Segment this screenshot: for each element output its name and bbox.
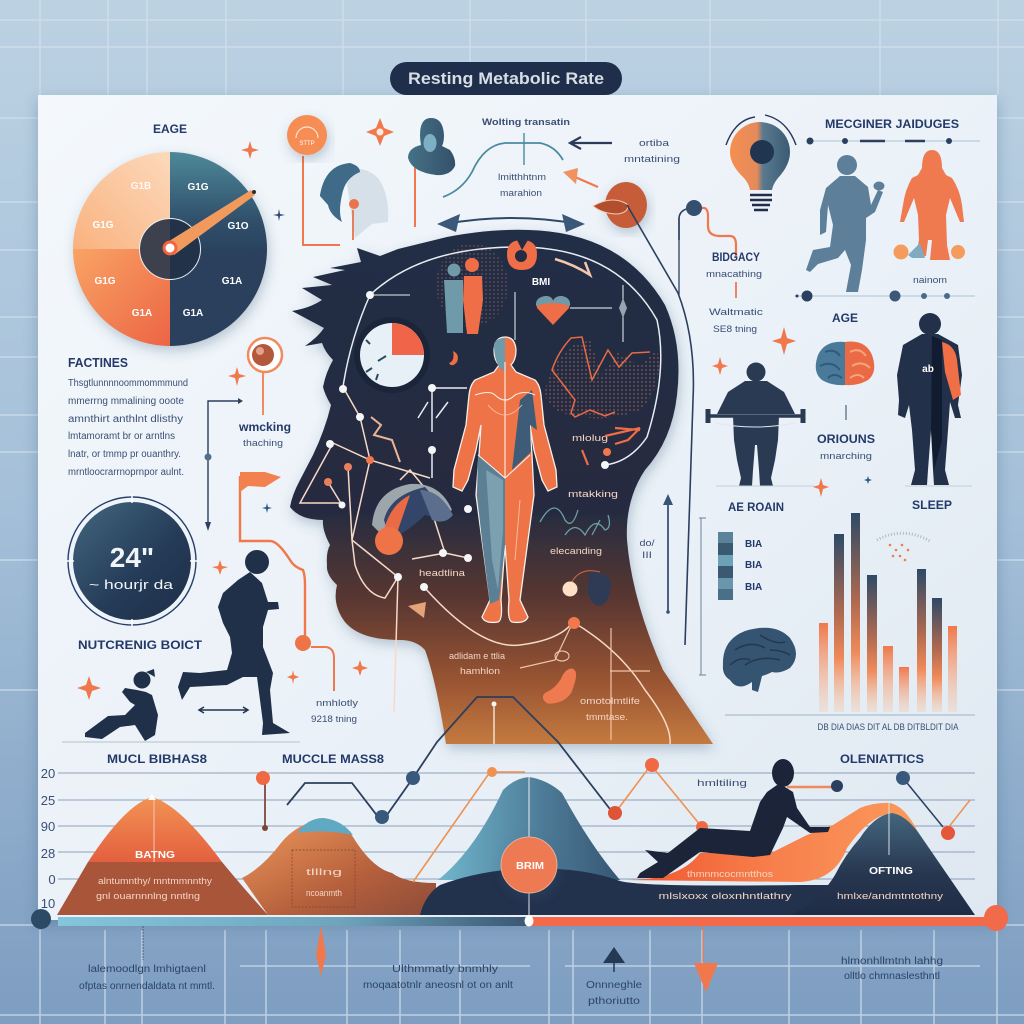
text: origins: ORIOUNS [817, 432, 875, 446]
head labels: hamhlon [460, 666, 500, 676]
text: origins [817, 405, 875, 461]
icon: clock [354, 317, 430, 393]
text: activity label [311, 698, 359, 724]
text: biology labels: SE8 tning [713, 324, 757, 334]
bottom annotations [79, 926, 943, 1007]
timeline bar [31, 905, 1008, 931]
mountain 4 navy peak: mlslxoxx oloxnhntlathry [658, 891, 792, 901]
axis labels: 25 [41, 793, 55, 808]
top flow diagram: lmitthhtnm [498, 172, 546, 182]
pie labels: G1A [132, 308, 152, 319]
navy man silhouette: ab [922, 364, 934, 375]
mountain 4 navy peak: hmlxe/andmtntothny [837, 891, 944, 901]
node dots [324, 291, 611, 706]
mountain 2 hill [242, 818, 436, 915]
axis labels [41, 766, 56, 911]
blue runner figure [806, 155, 884, 292]
mountain 4 navy peak: OFTING [869, 866, 913, 877]
pie labels: G1A [183, 308, 203, 319]
legend stripes [718, 532, 762, 600]
head labels: omotolmtlife [580, 696, 640, 706]
icon: 24 hour clock: 24" [110, 542, 154, 573]
connector: orange circuit left [240, 472, 334, 691]
icon: bust [408, 118, 455, 227]
pie labels: G1G [94, 276, 116, 287]
connected polylines [256, 697, 970, 882]
orange hump [627, 803, 918, 882]
text block: factors: amnthirt anthlnt dlisthy [68, 414, 183, 425]
icon: navy brain [723, 628, 796, 692]
pie labels: G1B [131, 181, 151, 192]
reclining person silhouette [637, 759, 830, 878]
head labels: elecanding [550, 546, 602, 556]
icon: orange dial badge with connector [287, 115, 340, 245]
pie labels: G1A [222, 276, 242, 287]
icon: check swoosh [555, 259, 590, 275]
top flow diagram [437, 117, 736, 258]
curve [443, 143, 563, 197]
dark wave base [420, 868, 975, 915]
double arrow [445, 218, 578, 224]
icon: female head profile [320, 163, 388, 240]
human anatomy body [453, 337, 557, 622]
bottom annotations: ofptas onrnendaldata nt mmtl. [79, 981, 215, 992]
orange centre circle: BRIM [516, 861, 544, 872]
orange kneeling figure [894, 150, 965, 285]
heading: nutrition: NUTCRENIG BOICT [78, 638, 203, 652]
mountain 4 navy peak [658, 803, 975, 915]
axis labels: 90 [41, 819, 55, 834]
head labels: mtakking [568, 489, 618, 499]
text block: factors: mrntloocrarrnoprnpor aulnt. [68, 467, 184, 478]
bottom line chart: hmltiling [697, 778, 747, 788]
bars [819, 513, 957, 712]
ground line [716, 485, 815, 487]
axis labels: 0 [48, 872, 56, 887]
text: biology labels: BIDGACY [712, 250, 760, 264]
icon: ring bead with stem [248, 338, 282, 415]
connector beads [694, 208, 736, 258]
bottom annotations: moqaatotnlr aneosnl ot on anlt [363, 980, 513, 991]
icon: sparkle [619, 298, 627, 318]
orange centre circle [501, 777, 557, 920]
mountain 2 hill: tlllng [306, 867, 342, 877]
bottom annotations: lalemoodlgn lmhigtaenl [88, 964, 206, 975]
icon: lightning [371, 417, 400, 462]
head labels: adlidam e ttlia [449, 651, 505, 661]
bottom annotations: olltlo chmnaslesthntl [844, 971, 940, 982]
text block: factors: mmerrng mmalining ooote [68, 396, 184, 407]
head labels [419, 433, 640, 722]
orange small arrow [582, 428, 640, 465]
navy man silhouette [897, 313, 962, 485]
icon: planet [605, 182, 647, 228]
icon: 24 hour clock [66, 495, 198, 627]
text block: factors: Thsgtlunnnnoommommmund [68, 378, 188, 389]
runner silhouette [178, 550, 290, 735]
small orange arrow [575, 177, 598, 187]
icon: heart [536, 296, 570, 325]
axis and tick labels [725, 714, 975, 716]
heading: sleep: SLEEP [912, 498, 952, 512]
mountain 1 orange: alntumnthy/ mntmmnnthy [98, 876, 213, 886]
title pill: Resting Metabolic Rate [408, 69, 604, 88]
pie chart [73, 152, 267, 346]
head labels: mlolug [572, 433, 608, 443]
squiggle chart [540, 508, 609, 535]
mountain 1 orange [57, 794, 268, 915]
legend stripes: BIA [745, 582, 762, 593]
text: biology labels [706, 250, 764, 334]
top flow diagram: marahion [500, 188, 542, 198]
legend stripes: BIA [745, 539, 762, 550]
small triangle pyramid [408, 602, 426, 618]
icon: orange ring [507, 240, 537, 270]
axis labels: 10 [41, 896, 55, 911]
mountain 1 orange: BATNG [135, 850, 175, 861]
weightlifter silhouette [707, 362, 803, 486]
mountain 1 orange: gnl ouarnnnlng nntlng [96, 891, 200, 901]
text: walking label: thaching [243, 438, 283, 448]
icon: stomach organ [372, 484, 453, 555]
small comma icon [449, 351, 458, 365]
icon: 24 hour clock: ~ hourjr da [89, 577, 174, 592]
text: walking label: wmcking [238, 420, 291, 434]
bottom annotations: pthoriutto [588, 996, 641, 1007]
gauge needle [164, 190, 256, 255]
double arrow small [199, 707, 248, 713]
neural line network [300, 247, 670, 744]
main panel [38, 95, 997, 920]
top flow diagram: Wolting transatin [482, 117, 570, 127]
callout markers [143, 926, 718, 992]
bottom line chart: OLENIATTICS [840, 752, 924, 766]
icon: light bulb [726, 115, 796, 210]
pie labels: G1G [187, 182, 209, 193]
legend and bar chart [699, 500, 975, 732]
dotted heart line chart [545, 337, 659, 418]
mountain 4 navy peak: thmnmcocmntthos [687, 869, 774, 879]
legend and bar chart: DB DIA DIAS DIT AL DB DITBLDIT DIA [818, 722, 958, 732]
heading: mechanism: MECGINER JAIDUGES [825, 117, 959, 131]
title pill [390, 62, 622, 95]
dotted timeline top [806, 138, 980, 144]
side up arrow: do/ [640, 538, 655, 548]
side up arrow [640, 494, 673, 614]
bottom annotations: hlmonhllmtnh lahhg [841, 956, 943, 967]
text block: factors [68, 355, 188, 478]
pie labels [92, 181, 249, 319]
top flow diagram: ortiba [639, 138, 669, 148]
orange kneeling figure: nainom [913, 275, 947, 285]
text block: factors: lnatr, or tmmp pr ouanthry. [68, 449, 181, 460]
text: origins: mnarching [820, 451, 872, 461]
text block: factors: FACTINES [68, 355, 128, 370]
icon: orange dial badge with connector: STTP [299, 141, 315, 147]
sitting woman silhouette [85, 669, 158, 741]
dashed axis [699, 518, 706, 675]
pie labels: G1G [92, 220, 114, 231]
head labels: headtlina [419, 568, 465, 578]
icon: organs bottom right [562, 571, 611, 606]
top flow diagram: mntatining [624, 154, 680, 164]
icon: couple figures [436, 243, 508, 334]
text: biology labels: mnacathing [706, 269, 762, 279]
long navy connector [627, 205, 693, 645]
panel: age pie gauge: EAGE [153, 122, 187, 136]
axis labels: 20 [41, 766, 55, 781]
dotted cluster [889, 544, 909, 561]
BMI label: BMI [532, 277, 550, 288]
text: activity label: nmhlotly [316, 698, 359, 708]
text: biology labels: Waltmatic [709, 307, 764, 317]
legend stripes: BIA [745, 560, 762, 571]
legend and bar chart: AE ROAIN [728, 500, 784, 514]
icon: brain two colour [816, 342, 874, 385]
bottom line chart: MUCCLE MASS8 [282, 752, 384, 766]
bracket arrow [204, 398, 243, 531]
panel: age pie gauge [73, 122, 267, 346]
icon: orange bean [544, 670, 575, 702]
text: activity label: 9218 tning [311, 714, 357, 724]
text: age heading: AGE [832, 311, 858, 325]
horizontal gridlines [58, 773, 975, 879]
pie labels: G1O [227, 221, 249, 232]
arrow left [570, 137, 612, 149]
small navy star [864, 476, 872, 484]
head silhouette [290, 230, 713, 744]
bottom annotations: Onnneghle [586, 980, 642, 991]
head labels: tmmtase. [586, 712, 628, 722]
mountain 3 blue [438, 777, 620, 880]
text block: factors: lmtamoramt br or arntlns [68, 431, 175, 442]
decorative stars [77, 118, 829, 700]
dotted timeline bottom [795, 290, 975, 302]
side up arrow: III [642, 550, 652, 560]
text: walking label [238, 420, 291, 448]
bottom line chart [41, 752, 975, 911]
ground shadow line [62, 741, 300, 743]
bottom annotations: Ulthmmatly bnmhly [392, 964, 498, 975]
bottom line chart: MUCL BIBHAS8 [107, 752, 207, 766]
axis labels: 28 [41, 846, 55, 861]
small oval icon [555, 651, 569, 661]
mountain 2 hill: ncoanmth [306, 888, 342, 898]
